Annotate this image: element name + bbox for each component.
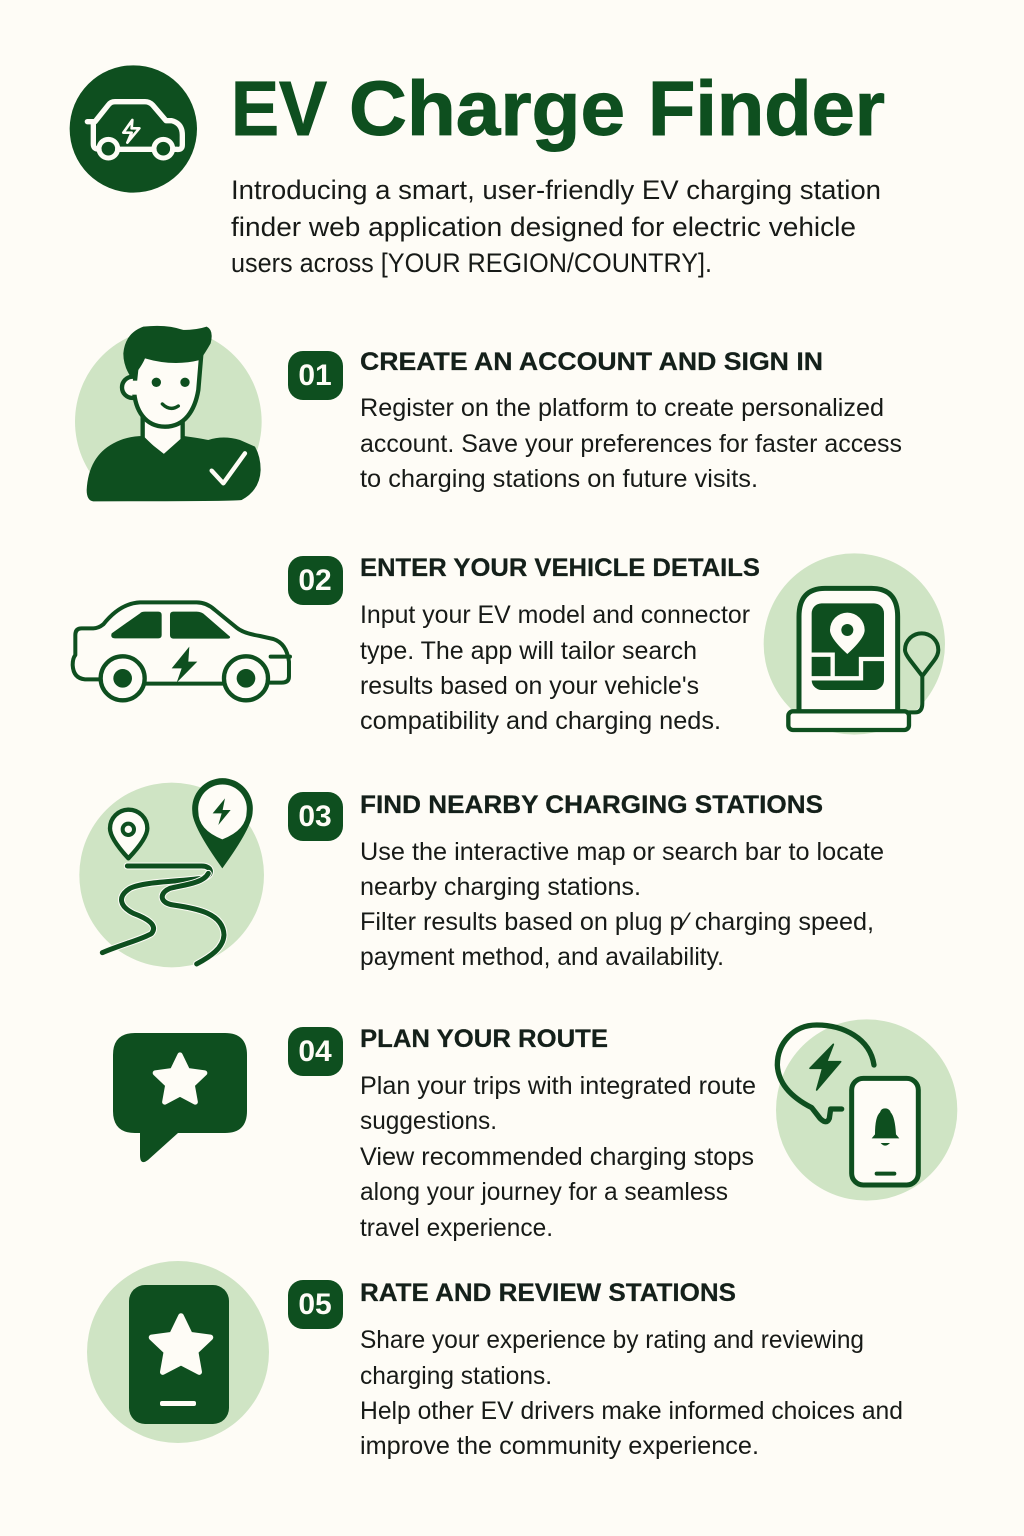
heading 3: FIND NEARBY CHARGING STATIONS (360, 791, 823, 819)
body 2: results based on your vehicle's (360, 672, 699, 700)
badge 02 (288, 556, 343, 605)
step 5 (288, 1279, 903, 1460)
body 3 (360, 838, 884, 971)
body 3: nearby charging stations. (360, 873, 641, 901)
step 2 (288, 554, 760, 735)
step 1 (288, 348, 902, 493)
icon: user account (75, 326, 262, 515)
badge 05: 05 (298, 1288, 332, 1321)
body 5 (360, 1326, 903, 1460)
body 5: Help other EV drivers make informed choices and (360, 1397, 903, 1425)
intro text (231, 175, 881, 278)
body 2: type. The app will tailor search (360, 637, 697, 665)
icon: phone notification and speech bubble (776, 1019, 957, 1201)
body 2: Input your EV model and connector (360, 601, 750, 629)
body 1 (360, 394, 902, 493)
body 3: Filter results based on plug p⁄ charging speed, (360, 908, 874, 936)
body 4: suggestions. (360, 1107, 497, 1135)
title: Charge (349, 66, 625, 152)
body 5: charging stations. (360, 1362, 552, 1390)
icon: route with map pins (79, 778, 264, 967)
body 4: along your journey for a seamless (360, 1178, 728, 1206)
body 4: View recommended charging stops (360, 1143, 754, 1171)
icon: chat bubble with star (113, 1033, 247, 1162)
intro text: Introducing a smart, user-friendly EV charging station (231, 175, 881, 205)
body 5: Share your experience by rating and reviewing (360, 1326, 864, 1354)
badge 03: 03 (298, 800, 332, 833)
badge 01: 01 (298, 359, 332, 392)
heading 4: PLAN YOUR ROUTE (360, 1025, 608, 1053)
body 4: travel experience. (360, 1214, 553, 1242)
heading 1: CREATE AN ACCOUNT AND SIGN IN (360, 348, 823, 376)
title: Finder (648, 66, 885, 152)
heading 2: ENTER YOUR VEHICLE DETAILS (360, 554, 760, 582)
icon: charging station with map (764, 553, 945, 735)
body 5: improve the community experience. (360, 1432, 759, 1460)
intro text: finder web application designed for electric vehicle (231, 212, 856, 242)
body 3: payment method, and availability. (360, 943, 724, 971)
body 4 (360, 1072, 756, 1242)
heading 5: RATE AND REVIEW STATIONS (360, 1279, 736, 1307)
title: EV (231, 66, 327, 152)
badge 05 (288, 1280, 343, 1329)
body 1: to charging stations on future visits. (360, 465, 758, 493)
badge 02: 02 (298, 564, 332, 597)
step 4 (288, 1025, 756, 1242)
icon: electric car (73, 602, 290, 700)
body 1: account. Save your preferences for faster access (360, 430, 902, 458)
body 1: Register on the platform to create personalized (360, 394, 884, 422)
icon: phone with star (87, 1261, 269, 1443)
badge 01 (288, 351, 343, 400)
body 2 (360, 601, 750, 735)
header icon: car in circle (70, 65, 197, 193)
intro text: users across [YOUR REGION/COUNTRY]. (231, 248, 712, 278)
step 3 (288, 791, 884, 971)
title (231, 66, 885, 152)
body 3: Use the interactive map or search bar to locate (360, 838, 884, 866)
body 4: Plan your trips with integrated route (360, 1072, 756, 1100)
badge 04 (288, 1027, 343, 1076)
badge 04: 04 (298, 1035, 332, 1068)
badge 03 (288, 792, 343, 841)
body 2: compatibility and charging neds. (360, 707, 721, 735)
